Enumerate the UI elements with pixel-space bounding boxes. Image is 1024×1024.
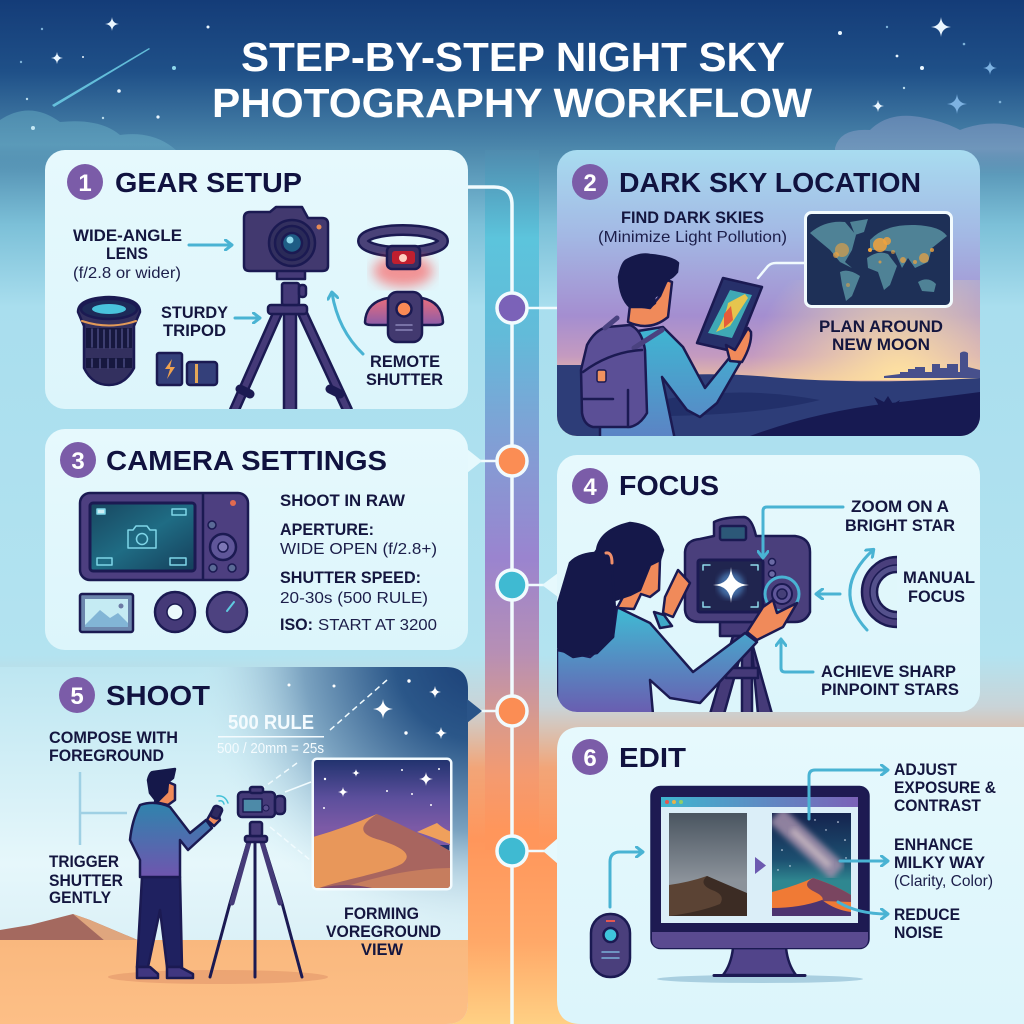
label: wide-angle lens: WIDE-ANGLE (73, 227, 182, 245)
light pollution map (806, 212, 952, 306)
label: compose with foreground (50, 732, 177, 761)
settings list: START AT 3200 (318, 617, 437, 634)
arrows (610, 770, 887, 914)
label: adjust exposure and contrast (894, 761, 996, 815)
settings list: APERTURE: (280, 521, 374, 539)
icon: focus ring (860, 556, 897, 628)
camera with star on screen (685, 517, 810, 622)
title: STEP-BY-STEP NIGHT SKY (241, 34, 785, 80)
label: achieve sharp pinpoint stars: PINPOINT STARS (821, 681, 959, 699)
camera back with LCD screen (80, 493, 248, 580)
label: achieve sharp pinpoint stars (821, 666, 958, 695)
remote control (591, 914, 630, 977)
label: zoom on a bright star: ZOOM ON A (851, 498, 949, 516)
field of view lines (263, 680, 387, 860)
title (212, 34, 812, 126)
label: enhance milky way: MILKY WAY (894, 854, 985, 872)
title: PHOTOGRAPHY WORKFLOW (212, 80, 812, 126)
label: wide-angle lens (73, 227, 182, 282)
label: sturdy tripod: TRIPOD (163, 322, 226, 340)
label: wide-angle lens: (f/2.8 or wider) (73, 265, 181, 282)
label: achieve sharp pinpoint stars: ACHIEVE SHARP (821, 663, 956, 681)
hills (557, 365, 980, 436)
label: trigger shutter gently: SHUTTER (49, 872, 123, 890)
label: adjust exposure and contrast: EXPOSURE & (894, 779, 996, 797)
label: manual focus: MANUAL (903, 569, 975, 587)
500 rule callout: 500 RULE (228, 712, 314, 734)
step badge 2 (572, 164, 608, 200)
step badge 6 (572, 739, 608, 775)
label: trigger shutter gently: GENTLY (49, 889, 111, 907)
label: manual focus (904, 572, 974, 602)
woman focusing camera (557, 523, 797, 714)
panel: 1 gear setup (45, 150, 468, 412)
heading: gear setup: GEAR SETUP (115, 167, 302, 198)
label: compose with foreground: COMPOSE WITH (49, 729, 178, 747)
stars (20, 17, 1001, 130)
timeline colour strip (485, 150, 539, 850)
icon: lens (78, 297, 140, 385)
before photo (669, 813, 747, 916)
500 rule callout: 500 / 20mm = 25s (217, 741, 324, 757)
icon: dial (207, 592, 247, 632)
map connector (758, 263, 805, 278)
label: find dark skies (598, 209, 787, 246)
step badge 4: 4 (583, 474, 597, 501)
heading: camera settings: CAMERA SETTINGS (106, 445, 387, 476)
arrows (763, 507, 873, 672)
settings list: SHOOT IN RAW (280, 492, 405, 510)
label: plan around new moon (820, 320, 942, 350)
label: sturdy tripod (161, 304, 228, 340)
label: adjust exposure and contrast: CONTRAST (894, 797, 981, 815)
night sky corner (235, 667, 468, 914)
sky stars (288, 679, 447, 739)
icon: photo (80, 594, 133, 632)
label: zoom on a bright star (846, 500, 955, 531)
step badge 4 (572, 468, 608, 504)
step badge 6: 6 (583, 745, 597, 772)
label: remote shutter: SHUTTER (366, 371, 443, 389)
label: forming foreground view: VOREGROUND (326, 923, 441, 941)
label: trigger shutter gently (49, 856, 123, 903)
label: manual focus: FOCUS (908, 588, 965, 606)
timeline spine with nodes (467, 187, 558, 1024)
step badge 1: 1 (78, 170, 92, 197)
settings list (280, 492, 437, 634)
heading: shoot: SHOOT (106, 680, 210, 711)
label: find dark skies: FIND DARK SKIES (621, 209, 764, 227)
step badge 5: 5 (70, 683, 84, 710)
label: reduce noise: REDUCE (894, 906, 960, 924)
icon: tripod (234, 270, 348, 412)
label: trigger shutter gently: TRIGGER (49, 853, 119, 871)
icon: aperture (155, 592, 195, 632)
bracket connector (80, 772, 127, 845)
step badge 1 (67, 164, 103, 200)
label: forming foreground view: VIEW (361, 941, 403, 959)
shooting star (52, 48, 150, 107)
desert ground (0, 914, 468, 1024)
label: compose with foreground: FOREGROUND (49, 747, 164, 765)
tripod (710, 622, 772, 714)
step badge 3 (60, 442, 96, 478)
heading: focus: FOCUS (619, 470, 719, 501)
monitor (652, 787, 868, 976)
step badge 5 (59, 677, 95, 713)
500 rule callout (218, 715, 324, 753)
icon: headlamp (363, 230, 443, 287)
monitor shadow (657, 975, 863, 983)
horizon glow (750, 280, 980, 380)
step badge 3: 3 (71, 448, 85, 475)
label: remote shutter: REMOTE (370, 353, 440, 371)
panel: 2 dark sky location (557, 150, 980, 440)
label: enhance milky way: ENHANCE (894, 836, 973, 854)
label: forming foreground view (326, 908, 440, 955)
label: forming foreground view: FORMING (344, 905, 419, 923)
label: sturdy tripod: STURDY (161, 304, 228, 322)
clouds (0, 110, 1024, 175)
settings list: WIDE OPEN (f/2.8+) (280, 541, 437, 558)
heading: dark sky location: DARK SKY LOCATION (619, 167, 921, 198)
heading: edit: EDIT (619, 742, 686, 773)
label: plan around new moon: PLAN AROUND (819, 318, 943, 336)
panel: 5 shoot (0, 660, 480, 1024)
person with backpack holding phone (581, 255, 762, 440)
step 5 pointer notch (467, 699, 482, 723)
label: zoom on a bright star: BRIGHT STAR (845, 517, 955, 535)
label: find dark skies: (Minimize Light Pollution) (598, 229, 787, 246)
settings list: SHUTTER SPEED: (280, 569, 421, 587)
label: reduce noise (894, 906, 960, 942)
label: enhance milky way (894, 836, 993, 890)
label: remote shutter (366, 353, 443, 389)
label: wide-angle lens: LENS (106, 245, 148, 263)
step badge 2: 2 (583, 170, 597, 197)
city skyline (884, 352, 980, 378)
label: reduce noise: NOISE (894, 924, 943, 942)
label: plan around new moon: NEW MOON (832, 336, 930, 354)
label: enhance milky way: (Clarity, Color) (894, 873, 993, 890)
composed photo preview (313, 759, 452, 890)
icon: battery and card (157, 353, 217, 385)
after photo milky way (772, 813, 851, 916)
arrows (189, 245, 363, 354)
panel: 3 camera settings (45, 429, 468, 650)
icon: camera (244, 207, 328, 271)
settings list: 20-30s (500 RULE) (280, 590, 428, 607)
label: adjust exposure and contrast: ADJUST (894, 761, 957, 779)
settings list: ISO: (280, 616, 313, 634)
icon: remote shutter (365, 292, 443, 342)
transition arrow (755, 857, 766, 874)
tripod and camera (210, 787, 302, 977)
panel: 6 edit (557, 727, 1024, 1024)
photographer (130, 769, 228, 978)
panel: 4 focus (557, 455, 980, 714)
